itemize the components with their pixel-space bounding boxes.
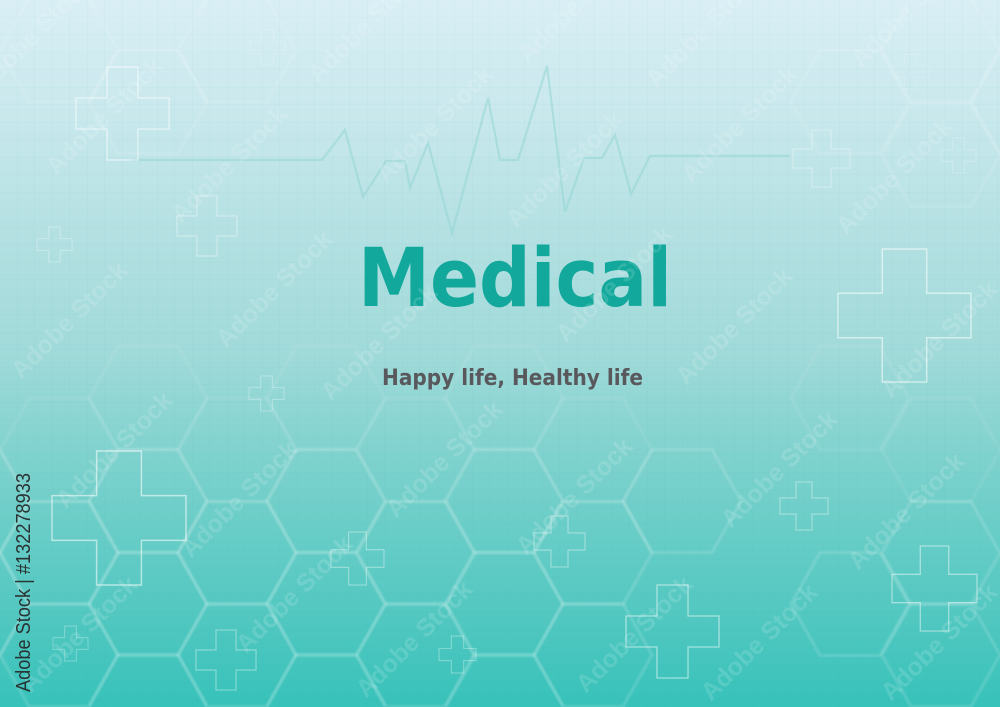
hexagons: middle row: [0, 346, 1000, 502]
stock watermarks: Adobe Stock: [715, 405, 843, 533]
stock watermarks: Adobe Stock: [210, 225, 338, 353]
cross: top left faint: [250, 30, 285, 65]
stock watermarks: Adobe Stock: [15, 570, 143, 698]
stock watermarks: Adobe Stock: [500, 105, 628, 233]
stock watermarks: Adobe Stock: [695, 578, 823, 706]
stock watermarks: Adobe Stock: [550, 220, 678, 348]
cross: top right medium: [793, 130, 850, 187]
stock watermarks: Adobe Stock: [380, 395, 508, 523]
cross: bottom centre: [534, 516, 585, 567]
cross: bottom left small: [53, 626, 88, 661]
hexagons: top: [0, 0, 1000, 206]
stock id label: Adobe Stock | #132278933: [13, 473, 35, 692]
cross: top right small: [941, 138, 976, 173]
cross: top right faint: [893, 54, 928, 89]
cross: left medium: [177, 196, 237, 256]
hexagons: bottom: [0, 450, 1000, 706]
stock watermarks: Adobe Stock: [40, 52, 168, 180]
cross: bottom centre large: [626, 585, 719, 678]
stock watermarks: Adobe Stock: [510, 432, 638, 560]
stock watermarks: Adobe Stock: [570, 570, 698, 698]
stock watermarks: Adobe Stock: [165, 100, 293, 228]
cross: top left large: [76, 67, 169, 160]
stock watermarks: Adobe Stock: [842, 447, 970, 575]
cross: bottom right large: [892, 546, 977, 631]
cross: bottom centre small: [439, 636, 476, 673]
stock watermarks: Adobe Stock: [830, 112, 958, 240]
stock watermarks: Adobe Stock: [350, 575, 478, 703]
stock watermarks: Adobe Stock: [675, 60, 803, 188]
cross: bottom right small: [780, 482, 828, 530]
stock watermarks: Adobe Stock: [370, 60, 498, 188]
stock watermarks: Adobe Stock: [5, 256, 133, 384]
cross: bottom centre left: [331, 532, 384, 585]
stock watermarks: Adobe Stock: [175, 435, 303, 563]
stock watermarks: Adobe Stock: [670, 262, 798, 390]
stock watermarks: Adobe Stock: [315, 278, 443, 406]
cross: bottom left large: [52, 451, 186, 585]
stock watermarks: Adobe Stock: [50, 386, 178, 514]
stock watermarks: Adobe Stock: [875, 578, 1000, 706]
cross: bottom left medium: [196, 630, 256, 690]
stock watermarks: Adobe Stock: [230, 530, 358, 658]
cross: right large: [838, 249, 971, 382]
subtitle: Happy life, Healthy life: [382, 366, 643, 391]
cross: left small: [37, 227, 72, 262]
stock watermarks: Adobe Stock: [875, 275, 1000, 403]
cross: centre left small: [249, 376, 284, 411]
heartbeat line: [130, 66, 790, 233]
title: Medical: [358, 232, 672, 326]
